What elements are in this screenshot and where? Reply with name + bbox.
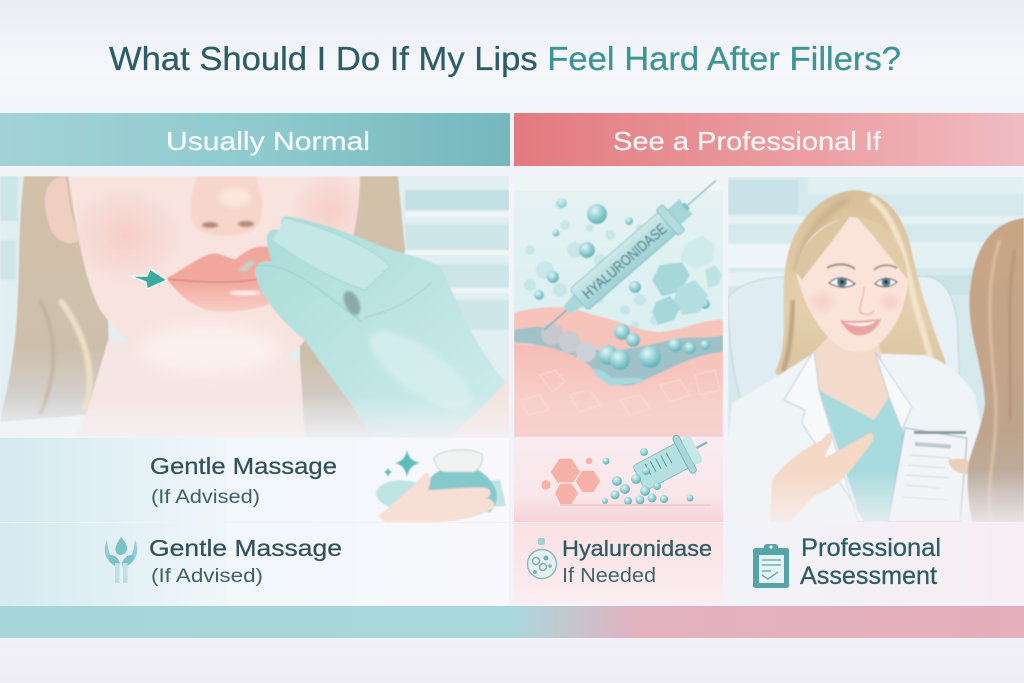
header: usually normal xyxy=(0,113,510,166)
white fade near bottom xyxy=(0,402,509,437)
micro bubbles xyxy=(602,448,694,505)
patient hair xyxy=(967,218,1024,522)
panel: lips being checked by gloved hand xyxy=(0,170,509,437)
title: What Should I Do If My Lips Feel Hard After Fillers? xyxy=(109,40,901,77)
icon: clipboard xyxy=(753,544,789,588)
coat xyxy=(728,353,981,516)
panel: hyaluronidase label row: If Needed xyxy=(562,565,656,587)
pharmacy shelves xyxy=(0,176,509,330)
panel: gentle massage row 1: (If Advised) xyxy=(151,487,260,508)
smile xyxy=(840,319,881,335)
panel: gentle massage row 2: (If Advised) xyxy=(151,566,263,587)
panel: hyaluronidase label row xyxy=(514,523,723,603)
header: usually normal: Usually Normal xyxy=(166,126,370,156)
icon: hand holding ice pack xyxy=(376,450,506,522)
tissue lines xyxy=(520,370,720,401)
chair xyxy=(728,276,784,398)
glove xyxy=(255,216,505,437)
ear xyxy=(45,176,80,243)
panel: hyaluronidase illustration xyxy=(514,168,727,437)
hexagons xyxy=(652,235,722,325)
icon: hands and droplet xyxy=(105,537,137,583)
skin layers xyxy=(514,345,723,437)
neck xyxy=(814,335,889,420)
neck and top xyxy=(0,415,85,437)
text: gentle massage 2: Gentle Massage xyxy=(149,535,342,561)
panel: mini hyaluronidase illustration xyxy=(514,424,723,522)
clipboard xyxy=(888,428,970,522)
bottom gradient band xyxy=(0,606,1024,638)
face xyxy=(68,176,361,358)
scrub top xyxy=(819,390,905,522)
text: gentle massage 1: Gentle Massage xyxy=(150,453,337,479)
nose xyxy=(190,176,262,236)
panel: professional assessment row: Assessment xyxy=(800,562,937,590)
syringe label: HYALURONIDASE xyxy=(579,220,671,303)
filler nodules xyxy=(541,323,710,370)
icon: flask with particles xyxy=(528,538,556,578)
panel: gentle massage row 1 xyxy=(0,438,509,522)
header: see a professional if: See a Professional If xyxy=(613,126,882,156)
text: professional assessment: Professional xyxy=(801,534,941,562)
text: hyaluronidase: Hyaluronidase xyxy=(562,536,712,561)
syringe xyxy=(543,180,717,331)
wrist skin xyxy=(464,380,509,427)
bright bubbles xyxy=(534,198,710,309)
face xyxy=(796,217,908,352)
header: see a professional if xyxy=(514,113,1024,166)
panel: gentle massage row 2 xyxy=(0,523,509,606)
hexagons xyxy=(541,457,601,505)
hand xyxy=(770,433,874,522)
panel: professional consultation xyxy=(728,177,1024,522)
arrow pointing to lip firmness xyxy=(130,269,167,289)
nose xyxy=(860,287,874,314)
background bubbles xyxy=(524,200,658,328)
clinic shelves xyxy=(728,178,1024,295)
coat lapels xyxy=(784,350,865,522)
hair xyxy=(0,176,110,422)
bottom fade xyxy=(770,476,1024,522)
syringe xyxy=(629,424,717,497)
lips xyxy=(167,246,285,312)
panel: professional assessment row xyxy=(728,523,1024,603)
cheeks xyxy=(811,294,833,310)
eyes and brows xyxy=(827,264,897,287)
hair xyxy=(774,189,946,376)
